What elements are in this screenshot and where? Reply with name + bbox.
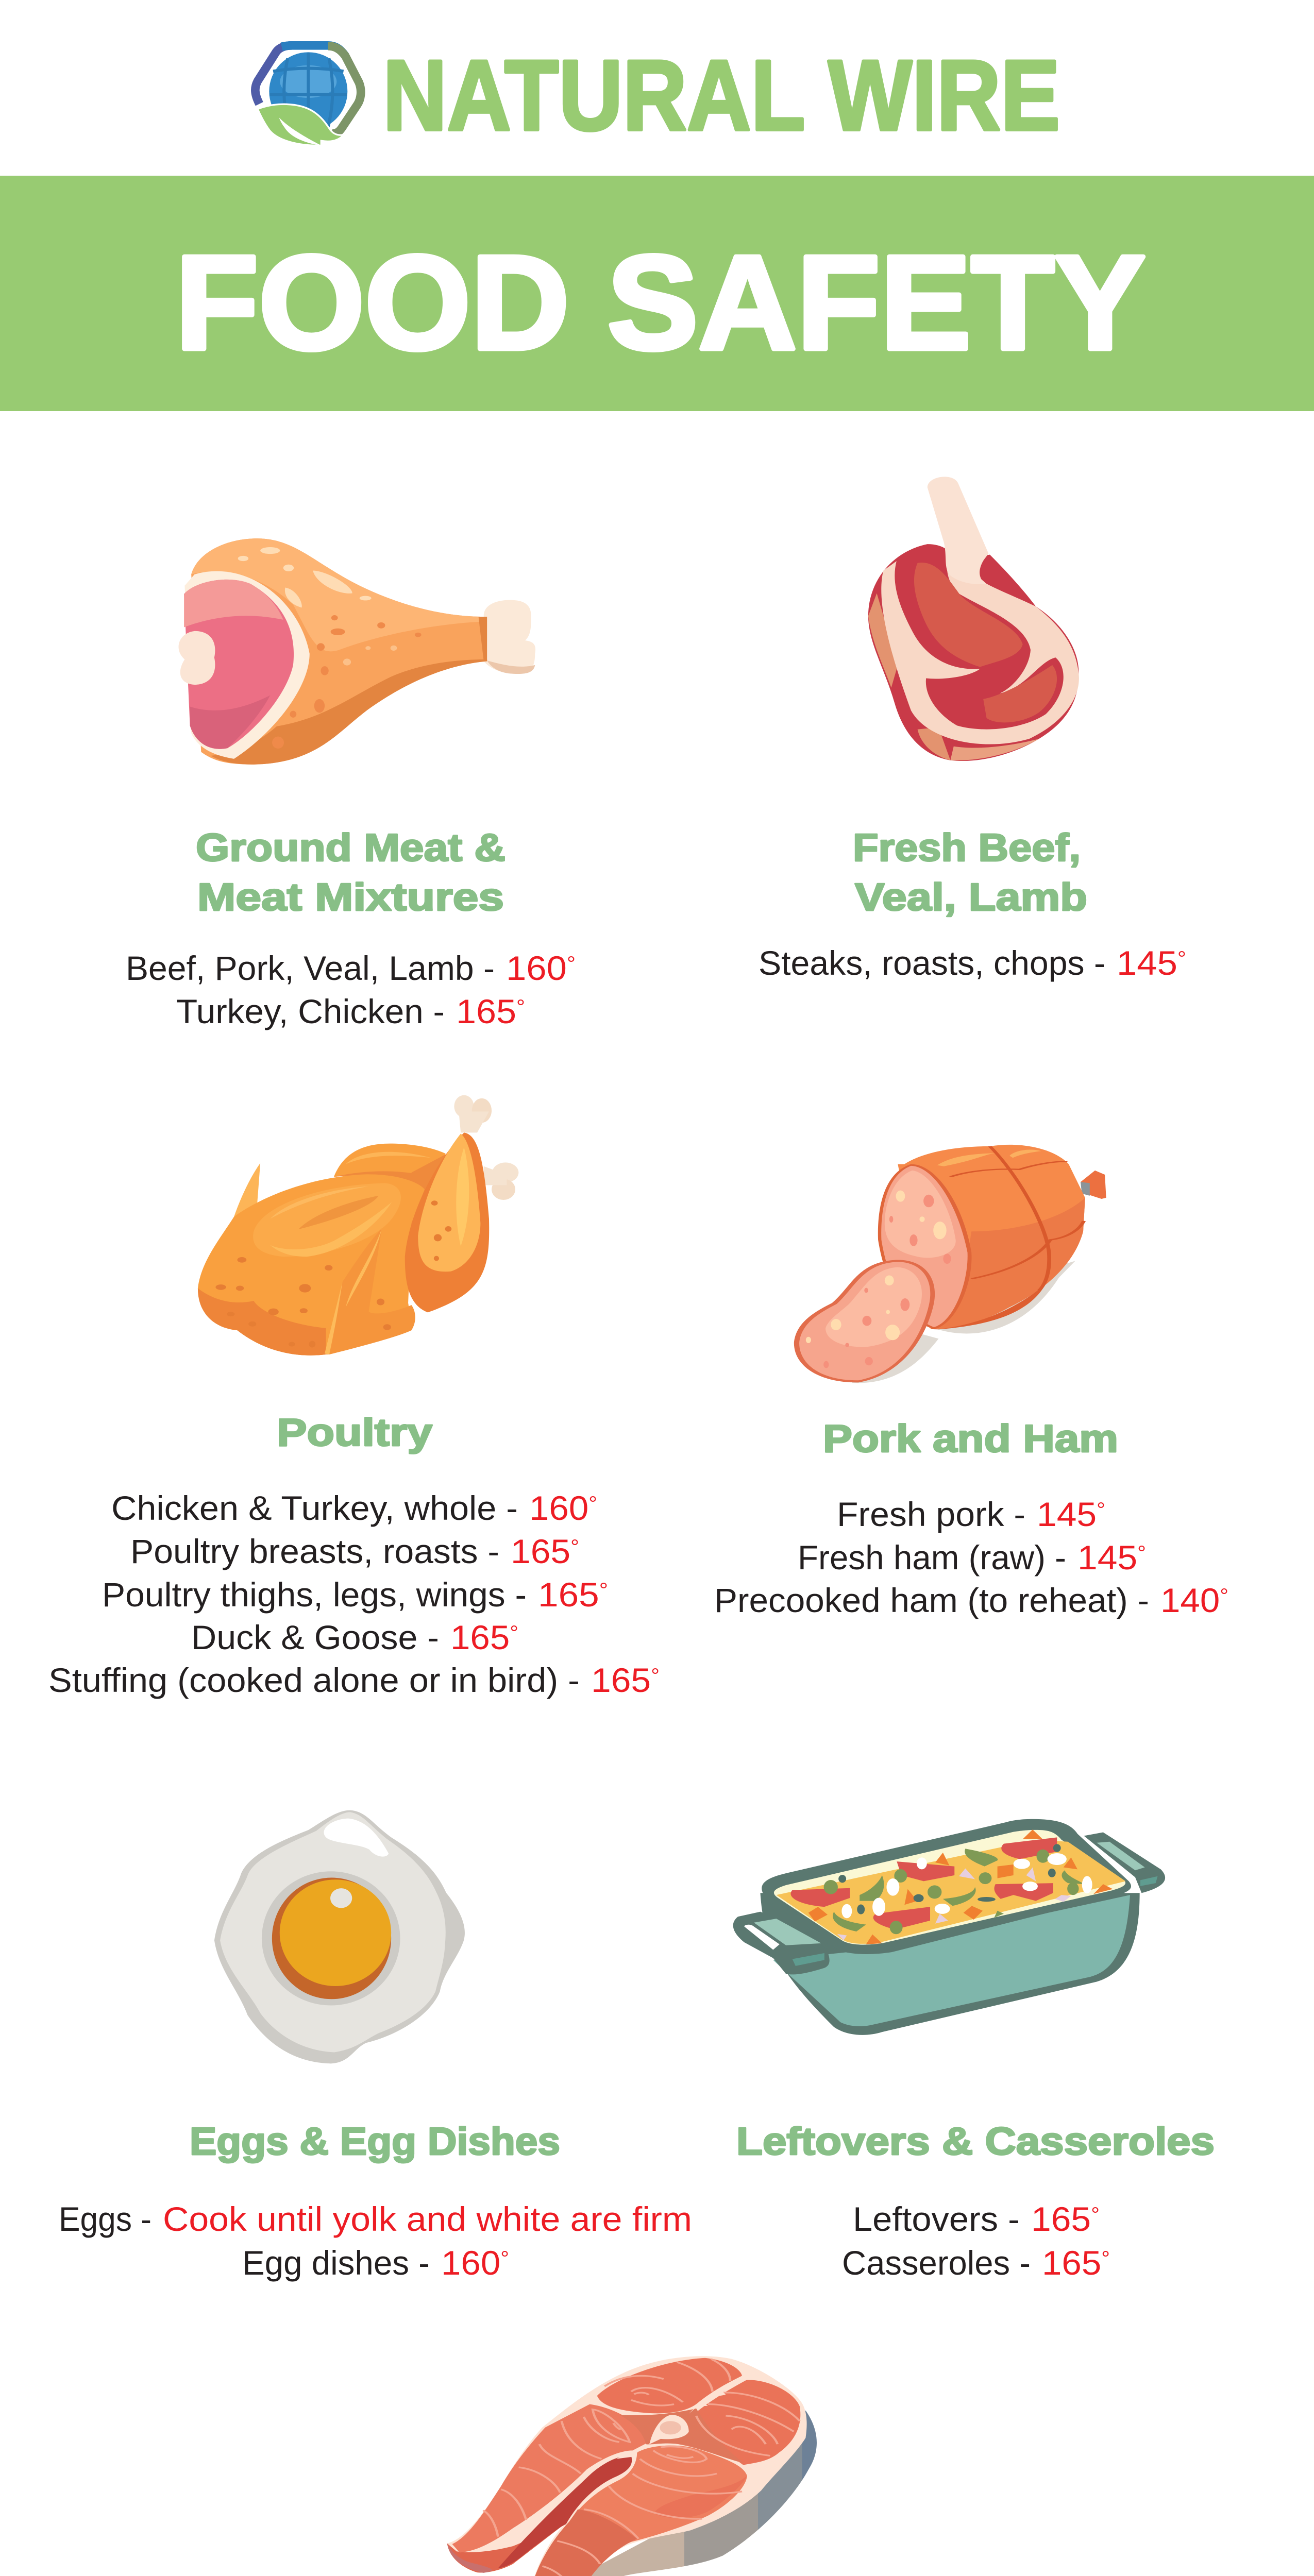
temperature list: ° <box>1137 1542 1146 1565</box>
temperature list <box>59 2200 692 2282</box>
temperature list: 145 <box>1077 1538 1134 1577</box>
panel: leftovers and casseroles <box>733 1819 1215 2282</box>
icon: steak <box>868 477 1079 761</box>
temperature list: Stuffing (cooked alone or in bird) - <box>48 1661 580 1699</box>
panel: pork and ham <box>714 1145 1228 1619</box>
panel: seafood <box>75 2356 1249 2576</box>
temperature list: Beef, Pork, Veal, Lamb - <box>126 949 495 987</box>
heading: Meat Mixtures <box>197 875 504 919</box>
temperature list <box>126 949 576 1030</box>
icon: ham <box>794 1145 1106 1383</box>
temperature list: Cook until yolk and white are firm <box>163 2200 692 2238</box>
logo: Natural Wire <box>255 40 1060 151</box>
heading: Fresh Beef, <box>853 826 1081 869</box>
temperature list: Egg dishes - <box>242 2244 430 2282</box>
heading: Ground Meat & <box>196 826 506 869</box>
panel: eggs and egg dishes <box>59 1810 692 2282</box>
icon: roast chicken <box>198 1095 518 1355</box>
title: FOOD SAFETY <box>175 228 1145 378</box>
heading: Eggs & Egg Dishes <box>190 2120 560 2163</box>
heading: Poultry <box>277 1411 432 1454</box>
panel: ground meat and meat mixtures <box>126 538 576 1030</box>
heading: Leftovers & Casseroles <box>736 2120 1215 2163</box>
title banner <box>0 176 1314 411</box>
temperature list: 165 <box>511 1532 567 1570</box>
temperature list: 165 <box>1042 2244 1099 2282</box>
heading <box>853 826 1087 919</box>
temperature value: ° <box>1177 947 1186 970</box>
temperature list: 145 <box>1037 1495 1093 1533</box>
icon: salmon steak <box>447 2356 817 2576</box>
temperature list: Poultry thighs, legs, wings - <box>102 1575 527 1614</box>
temperature list: ° <box>588 1493 597 1515</box>
panel: poultry <box>48 1095 660 1699</box>
temperature list: Eggs - <box>59 2200 151 2238</box>
temperature list: Poultry breasts, roasts - <box>130 1532 499 1570</box>
icon: casserole dish <box>733 1819 1165 2035</box>
temperature value: 145 <box>1117 944 1173 982</box>
temperature list: ° <box>599 1579 608 1602</box>
icon: globe and leaf <box>255 45 361 145</box>
temperature list: Chicken & Turkey, whole - <box>111 1489 518 1527</box>
icon: drumstick <box>179 538 535 765</box>
temperature list: Fresh ham (raw) - <box>798 1538 1066 1577</box>
temperature list: 160 <box>506 949 563 987</box>
temperature list: Turkey, Chicken - <box>176 992 445 1030</box>
panel: fresh beef, veal, lamb <box>759 477 1186 982</box>
temperature list: 165 <box>591 1661 648 1699</box>
temperature list <box>714 1495 1228 1619</box>
heading: Veal, Lamb <box>855 875 1087 919</box>
temperature list: ° <box>567 953 576 975</box>
temperature list: ° <box>1097 1499 1105 1521</box>
temperature list: Fresh pork - <box>837 1495 1025 1533</box>
temperature list: 160 <box>441 2244 498 2282</box>
heading: Pork and Ham <box>823 1417 1118 1460</box>
temperature list: ° <box>500 2247 509 2270</box>
temperature list: ° <box>1220 1585 1228 1607</box>
temperature list: Steaks, roasts, chops - <box>759 944 1105 982</box>
temperature list <box>48 1489 660 1699</box>
temperature list <box>842 2200 1110 2282</box>
temperature list: ° <box>1091 2204 1100 2226</box>
wordmark: NATURAL WIRE <box>383 40 1060 151</box>
temperature list: 160 <box>529 1489 586 1527</box>
temperature list: 165 <box>1031 2200 1088 2238</box>
icon: fried egg <box>214 1810 465 2063</box>
temperature list: 165 <box>538 1575 595 1614</box>
temperature list: ° <box>651 1665 660 1687</box>
temperature list: 165 <box>456 992 513 1030</box>
temperature list: ° <box>510 1622 518 1645</box>
heading <box>196 826 506 919</box>
temperature list: Precooked ham (to reheat) - <box>714 1581 1149 1619</box>
temperature list: ° <box>516 996 525 1019</box>
temperature list: ° <box>570 1536 579 1558</box>
temperature list: 140 <box>1160 1581 1217 1619</box>
temperature list: Leftovers - <box>853 2200 1020 2238</box>
temperature list: ° <box>1101 2247 1110 2270</box>
temperature list: Casseroles - <box>842 2244 1031 2282</box>
temperature list: 165 <box>450 1618 507 1656</box>
temperature list: Duck & Goose - <box>191 1618 439 1656</box>
